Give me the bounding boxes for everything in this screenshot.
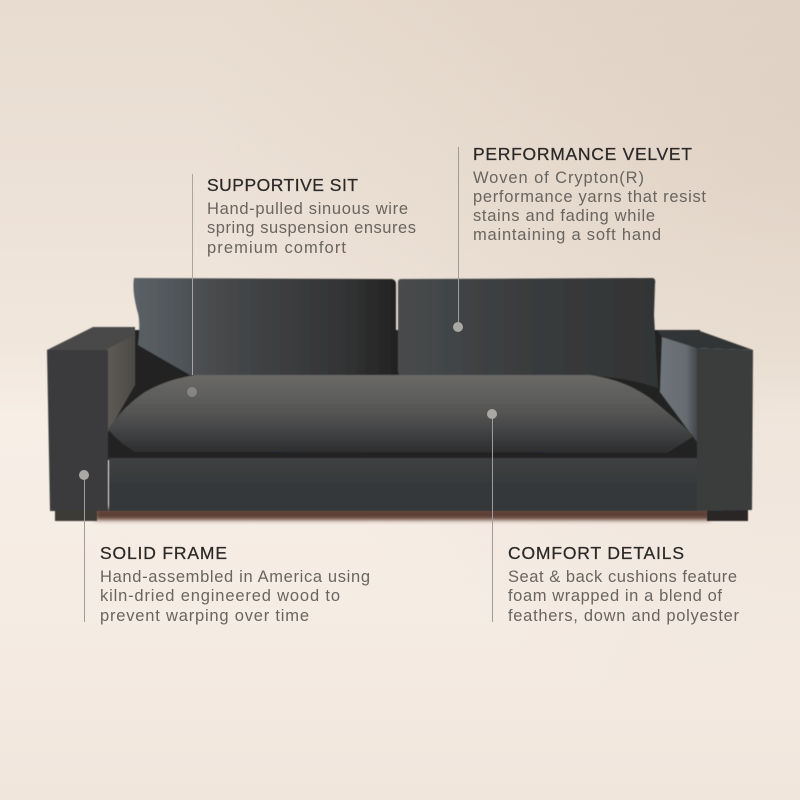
arm top xyxy=(657,330,753,350)
callout: performance velvet: Woven of Crypton(R) xyxy=(473,169,644,187)
callout: comfort details: foam wrapped in a blend of xyxy=(508,587,722,605)
sofa feet xyxy=(55,510,748,521)
back frame xyxy=(100,330,700,460)
callout: comfort details: Seat & back cushions feature xyxy=(508,568,737,586)
back cushion right xyxy=(398,278,658,388)
callout: supportive sit xyxy=(187,174,416,397)
seat cushion xyxy=(108,375,694,453)
callout: supportive sit: SUPPORTIVE SIT xyxy=(207,175,358,195)
callout: performance velvet: maintaining a soft hand xyxy=(473,226,661,244)
callout: performance velvet: stains and fading while xyxy=(473,207,655,225)
arm inner face xyxy=(660,337,697,442)
callout: solid frame xyxy=(79,470,370,625)
callout: comfort details: feathers, down and polyester xyxy=(508,607,740,625)
sofa xyxy=(47,278,753,521)
callout: supportive sit: premium comfort xyxy=(207,239,346,257)
callout: performance velvet: PERFORMANCE VELVET xyxy=(473,144,692,164)
arm front xyxy=(47,350,108,511)
floor shadow xyxy=(95,508,710,520)
callout: comfort details: COMFORT DETAILS xyxy=(508,543,684,563)
left arm xyxy=(47,327,135,511)
callout: solid frame: prevent warping over time xyxy=(100,607,309,625)
callout: solid frame: Hand-assembled in America using xyxy=(100,568,370,586)
callout: supportive sit: spring suspension ensures xyxy=(207,219,416,237)
arm front xyxy=(697,348,753,511)
arm inner face xyxy=(105,334,135,432)
right arm xyxy=(657,330,753,511)
callout: comfort details xyxy=(487,409,740,625)
callout: solid frame: kiln-dried engineered wood to xyxy=(100,587,340,605)
callout: supportive sit: Hand-pulled sinuous wire xyxy=(207,200,408,218)
callout: performance velvet xyxy=(453,144,706,332)
arm top xyxy=(47,327,135,350)
callout: performance velvet: performance yarns that resist xyxy=(473,188,706,206)
back cushion left xyxy=(133,278,396,375)
base xyxy=(109,458,697,511)
callout: solid frame: SOLID FRAME xyxy=(100,543,227,563)
